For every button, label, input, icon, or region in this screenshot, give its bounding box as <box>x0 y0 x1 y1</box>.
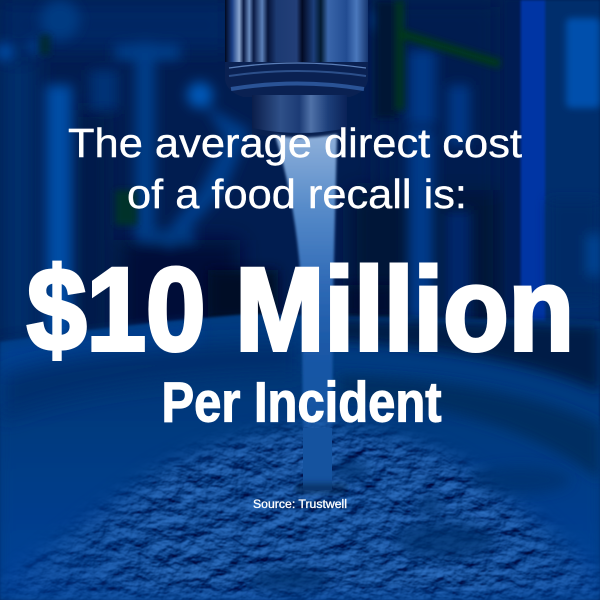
powder stream <box>275 134 337 492</box>
heading <box>68 120 523 217</box>
heading: of a food recall is: <box>127 171 467 217</box>
subheading: Per Incident <box>162 370 442 434</box>
metal nozzle <box>225 0 368 138</box>
green tints <box>40 0 598 300</box>
source note: Source: Trustwell <box>253 499 347 511</box>
bowl rim and surface <box>0 314 600 600</box>
heading: The average direct cost <box>68 120 523 166</box>
powder pile <box>5 418 600 600</box>
window shape <box>566 18 600 108</box>
